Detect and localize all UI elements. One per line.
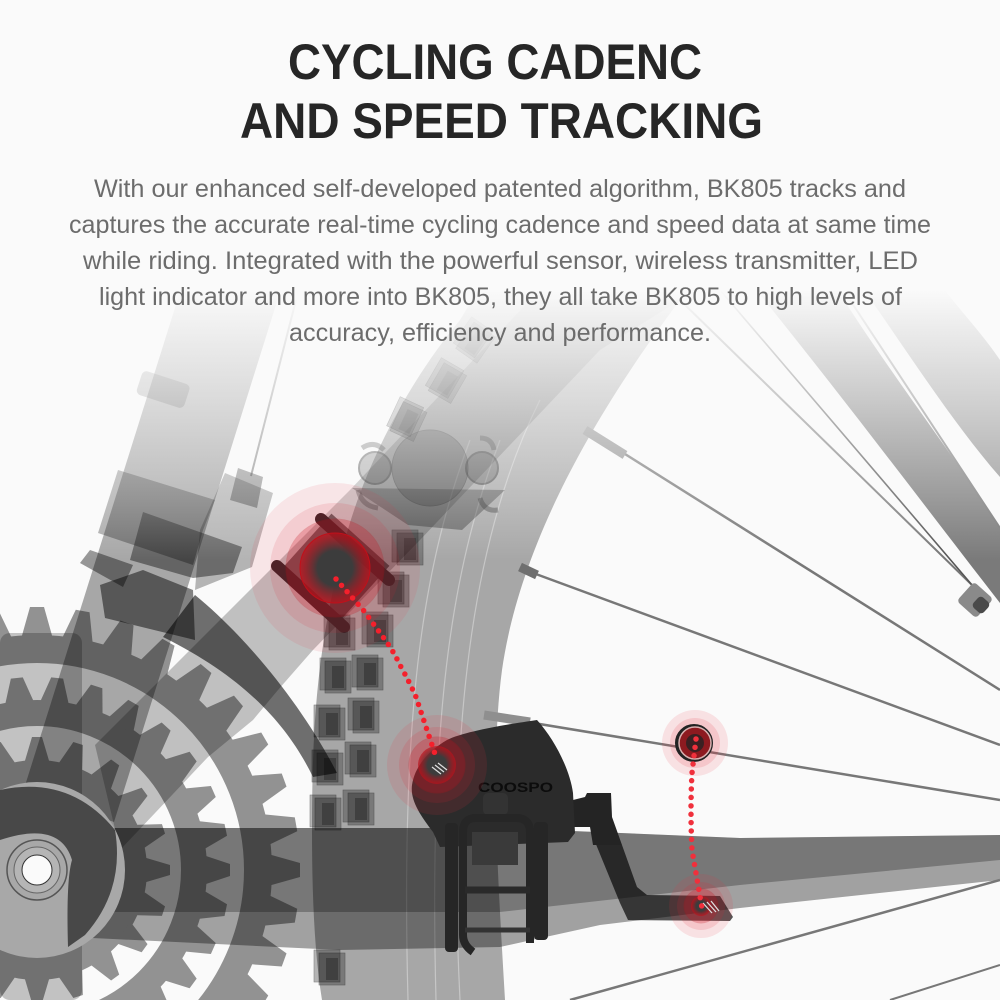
chainring middle (0, 676, 230, 1000)
spoke nipple (957, 582, 993, 618)
front derailleur (80, 300, 337, 777)
dotted connector: speed (691, 739, 702, 908)
description paragraph (69, 175, 931, 347)
sensor body (412, 720, 575, 847)
title: AND SPEED TRACKING (240, 93, 763, 149)
seat tube (23, 260, 290, 822)
description paragraph: light indicator and more into BK805, they all take BK805 to high levels of (99, 283, 902, 311)
rear tire and rim (310, 270, 690, 1000)
sensor mount arm (573, 793, 733, 921)
description paragraph: accuracy, efficiency and performance. (289, 319, 711, 347)
mounting strap (445, 818, 548, 952)
chainring large (0, 607, 300, 1000)
description paragraph: while riding. Integrated with the powerful sensor, wireless transmitter, LED (82, 247, 918, 275)
button patch (483, 793, 508, 815)
bicycle illustration (0, 260, 1000, 1000)
title: CYCLING CADENC (288, 34, 702, 90)
seat stay diagonal tube (95, 300, 680, 850)
bracket on crank (277, 514, 389, 627)
dotted connector: cadence (336, 579, 437, 760)
top fade over illustration (0, 260, 1000, 560)
spokes (484, 290, 1000, 1000)
red signal: wheel magnet (662, 710, 728, 776)
chain stay horizontal tube (72, 828, 1000, 950)
COOSPO logo: COOSPO (478, 779, 553, 795)
red signal: spoke sensor node (669, 874, 733, 938)
red signal: frame magnet (250, 483, 420, 653)
tire tread knobs (310, 317, 497, 985)
left vertical tube (0, 633, 82, 1000)
chain stay upper tube (72, 828, 1000, 912)
red signal: sensor node (387, 715, 487, 815)
chainring small (0, 737, 170, 1000)
bottom bracket and crank (0, 782, 125, 958)
description paragraph: captures the accurate real-time cycling cadence and speed data at same time (69, 211, 931, 239)
description paragraph: With our enhanced self-developed patented algorithm, BK805 tracks and (94, 175, 906, 203)
title (240, 34, 763, 149)
upper right frame tubes (740, 270, 1000, 603)
CADENCE SENSOR (412, 720, 733, 952)
tire valve / brake hub (352, 430, 505, 530)
